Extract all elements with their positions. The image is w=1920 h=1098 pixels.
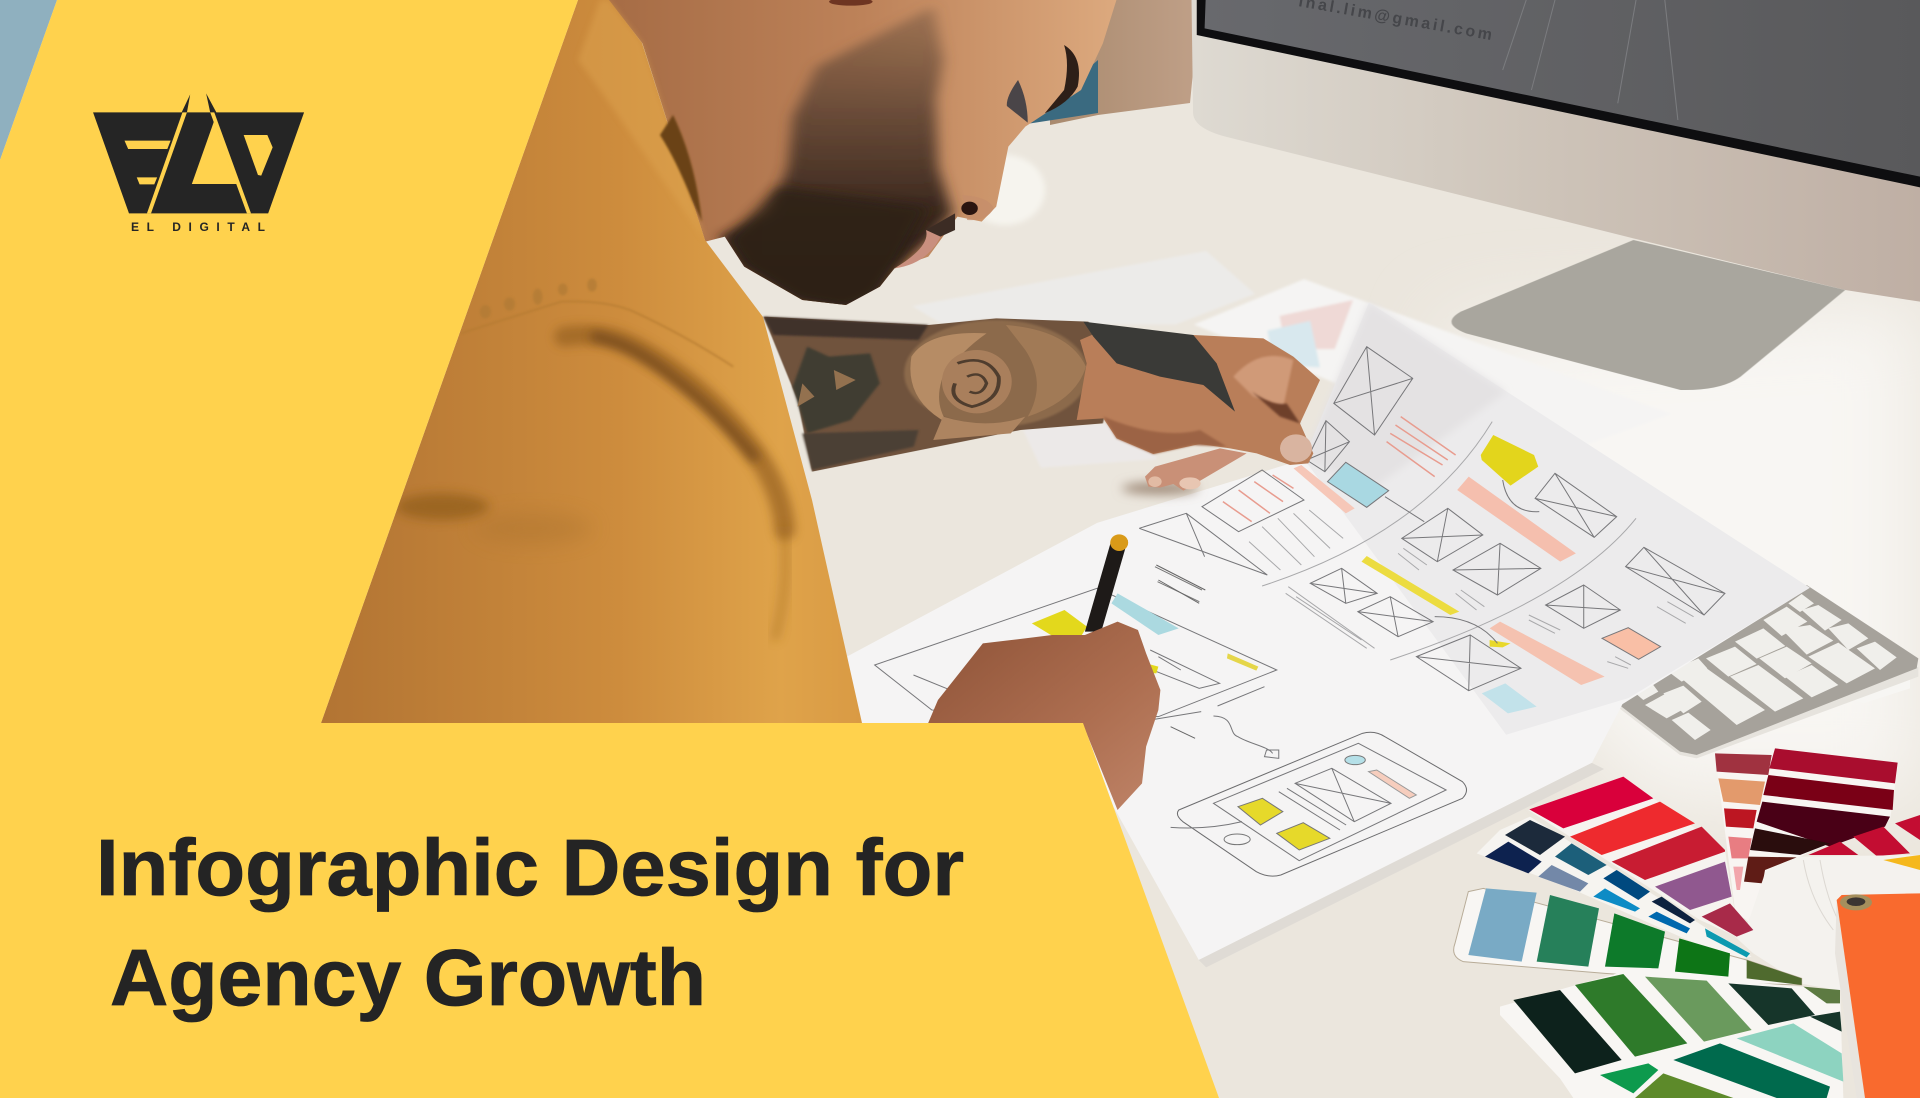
monitor stand: [1452, 240, 1845, 390]
logo: EL Digital: [93, 93, 304, 234]
nostril: [961, 202, 978, 215]
shadow on the left of the shirt: [396, 493, 489, 520]
green fan: [1454, 888, 1802, 985]
squiggle arrow: [1171, 687, 1279, 828]
back of hand: [1077, 330, 1320, 465]
title: [96, 823, 964, 1022]
keyboard: [1615, 585, 1918, 758]
title: Infographic Design for: [96, 823, 964, 912]
shirt base: [321, 0, 862, 723]
navy and blue fan: [1477, 817, 1752, 960]
drawing hand holding a pencil: [928, 534, 1160, 810]
slit between L and D: [210, 112, 251, 213]
rose tattoo: [904, 320, 1088, 440]
wireframe sketches on the lower sheet: [875, 565, 1467, 876]
resting hand holding the sheet: [1077, 322, 1320, 494]
background wall behind the head: [1020, 0, 1200, 125]
yellow diagonal banner: [0, 0, 1219, 1098]
orange card: [1835, 900, 1865, 1098]
dark tattoo leaves: [793, 347, 880, 433]
dark green and teal fan: [1500, 972, 1843, 1098]
mobile screen sketch: [1177, 732, 1467, 876]
logo mark: [93, 93, 304, 213]
pencil gold tip: [1110, 534, 1128, 551]
ear lobe: [829, 0, 873, 6]
hand: [928, 622, 1160, 810]
grey text lines: [1249, 422, 1694, 668]
slit between E and L: [147, 112, 187, 213]
shadow on desk: [1122, 482, 1198, 494]
pencil: [1085, 540, 1128, 632]
beard: [720, 7, 953, 310]
coloured blocks: [1327, 462, 1389, 507]
page layout sketch: [875, 588, 1277, 720]
red swatch cards: [1715, 753, 1775, 923]
red and purple fan: [1528, 777, 1753, 937]
logo wordmark: EL DIGITAL: [131, 220, 265, 234]
collar stitches: [480, 278, 597, 318]
lips: [894, 230, 943, 268]
face and neck: [608, 0, 1116, 305]
forearm base: [764, 317, 1117, 472]
computer monitor: [1192, 0, 1920, 302]
thumb nail: [1280, 434, 1312, 462]
coffee cup behind the face: [965, 155, 1045, 225]
white back of swatch fan: [1735, 855, 1920, 990]
shirt folds and seam: [396, 278, 785, 640]
right-hand fold: [775, 527, 785, 640]
hand tattoo: [1083, 322, 1235, 412]
crossed image placeholders: [1139, 347, 1725, 691]
cut-outs in the letters: [192, 122, 237, 184]
blue-grey corner of the background: [0, 0, 57, 160]
dark shoulder fold: [565, 335, 785, 530]
handwritten notes: [1156, 565, 1205, 738]
colour swatch fans: [1454, 748, 1920, 1098]
wireframe sheet: [847, 302, 1810, 967]
nose shading: [962, 195, 994, 220]
man's head with beard: [608, 0, 1116, 310]
collar: [578, 0, 705, 240]
pink text lines: [1223, 417, 1456, 522]
eyebrow: [1045, 45, 1079, 113]
wireframe sketches on the lifted sheet: [1139, 347, 1725, 713]
papers behind the arm: [912, 251, 1671, 468]
eye: [1007, 80, 1028, 123]
orange shirt: [321, 0, 862, 723]
fingers: [1145, 448, 1247, 491]
title: Agency Growth: [110, 933, 706, 1022]
tattooed forearm: [764, 317, 1117, 472]
